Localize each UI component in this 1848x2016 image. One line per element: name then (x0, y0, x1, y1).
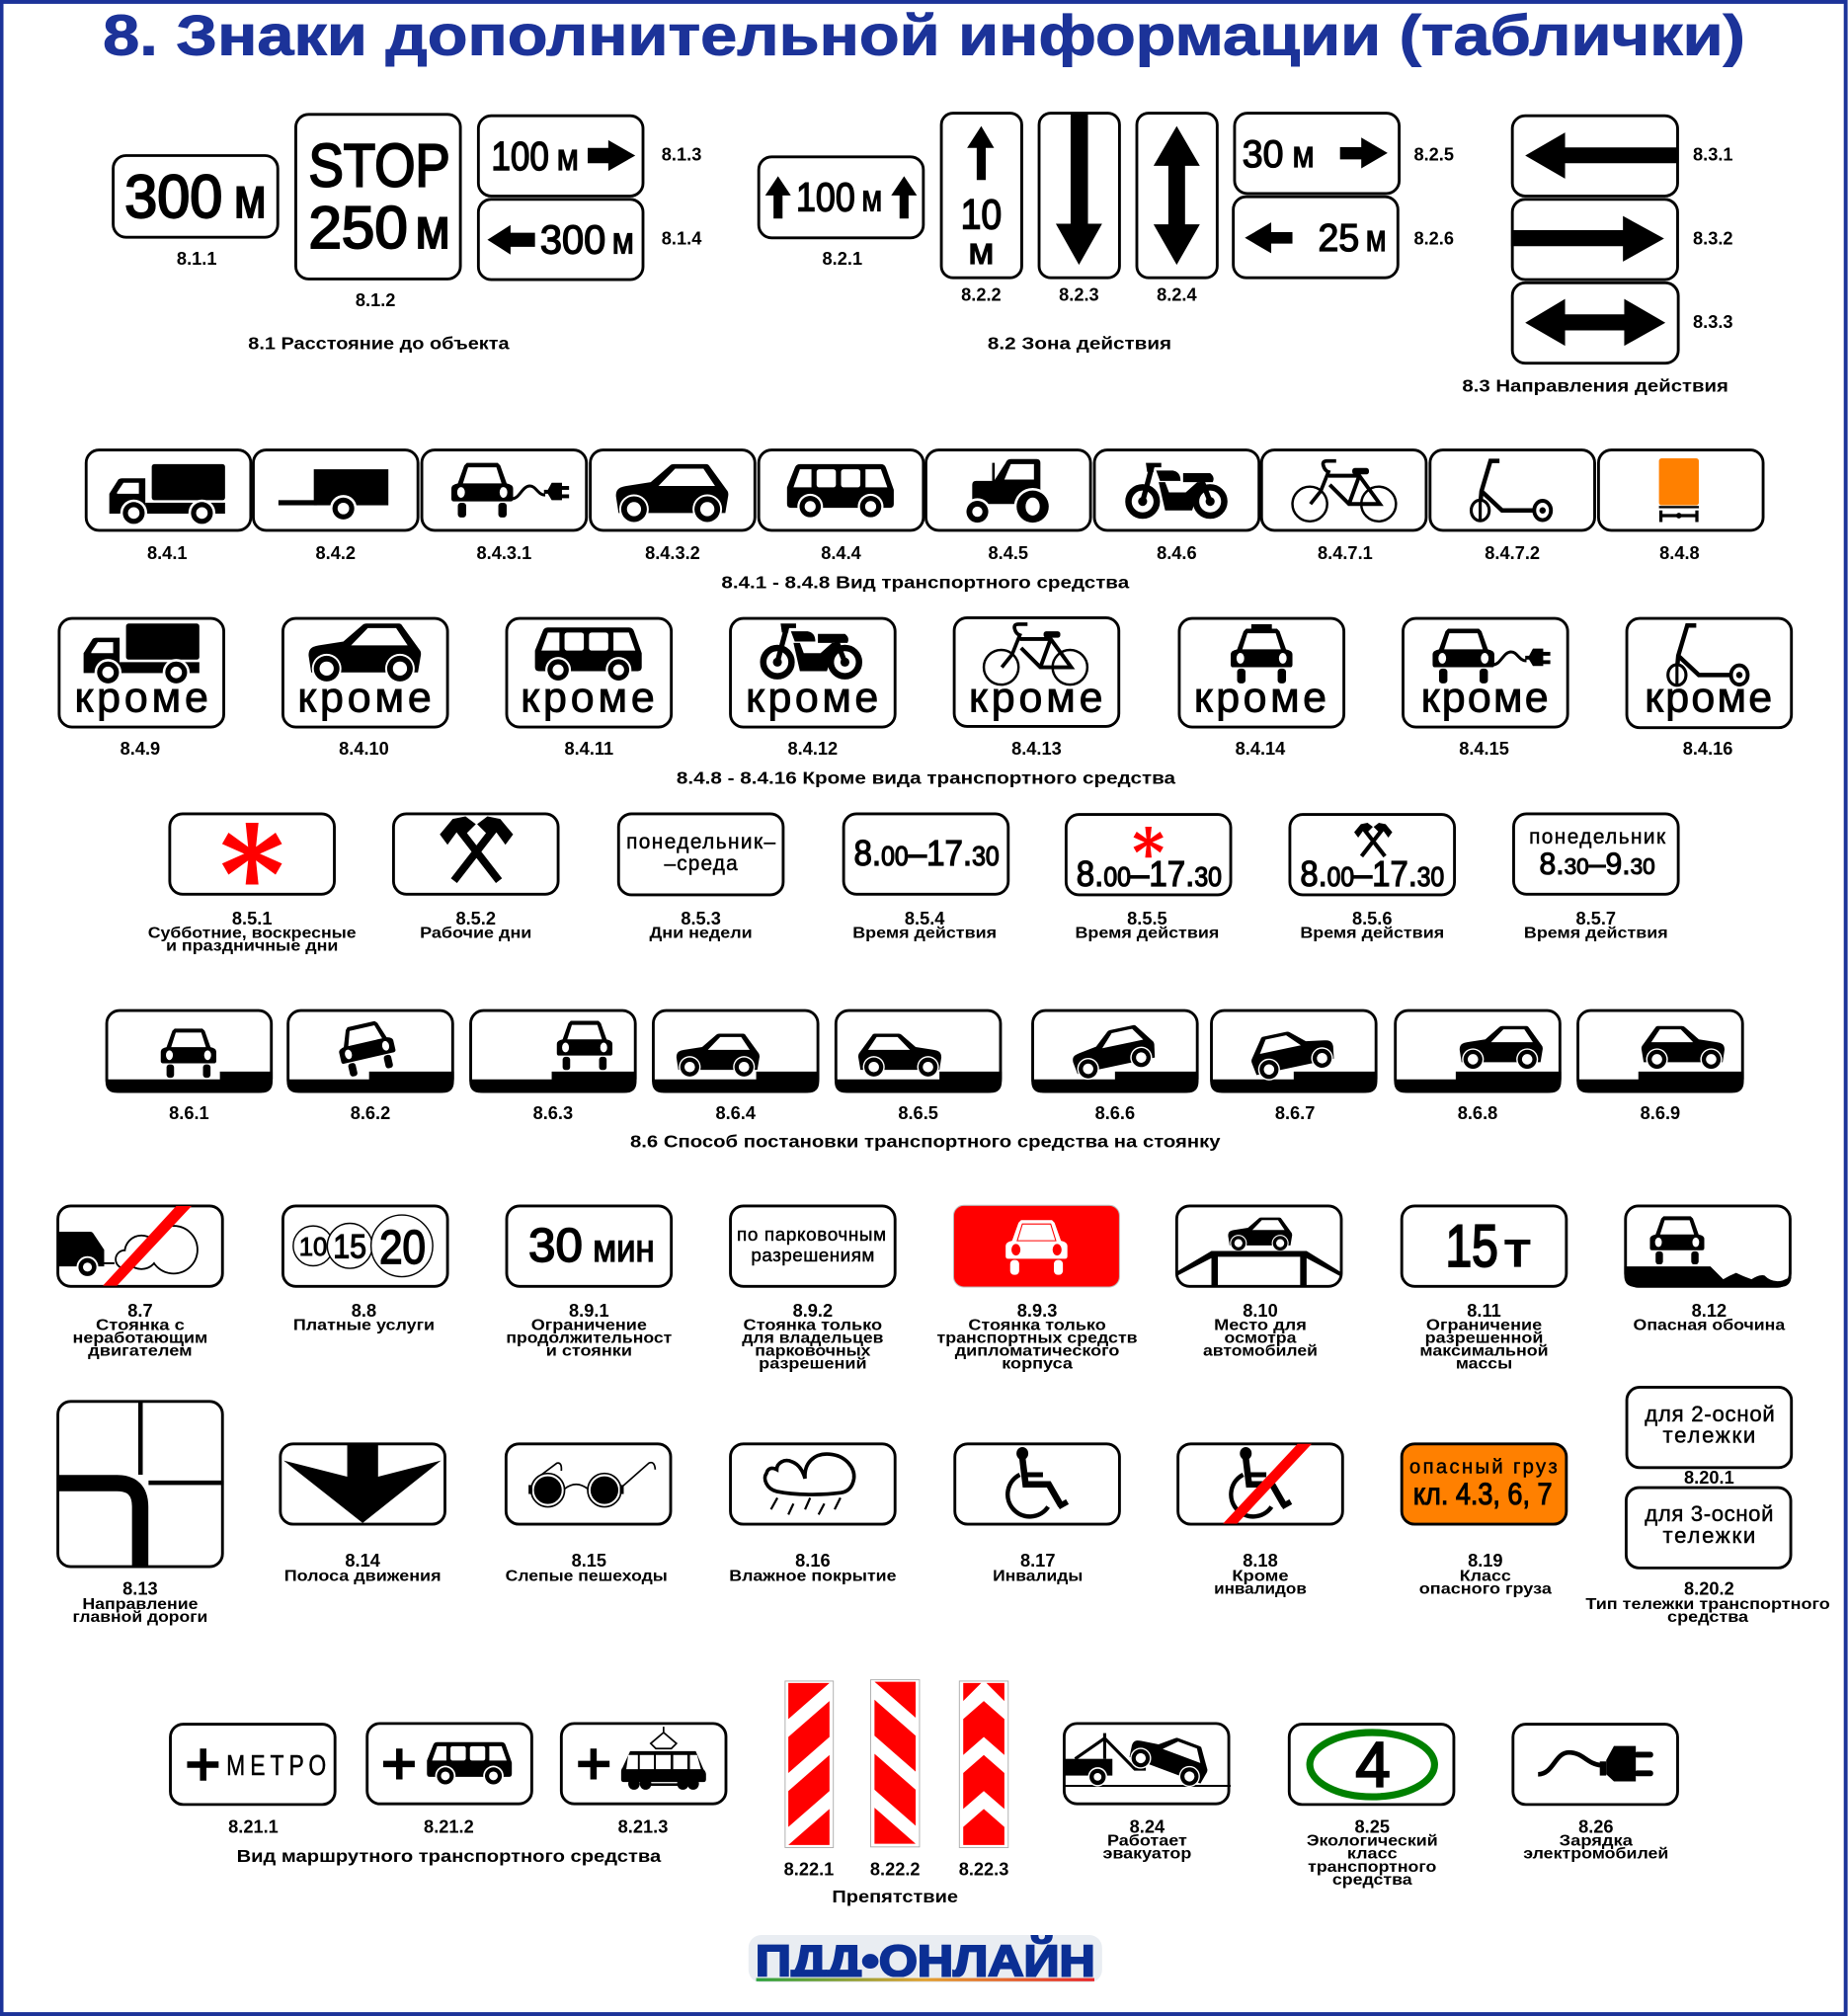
label 8.6.3: 8.6.3 (533, 1103, 573, 1123)
label 8.10 (1203, 1301, 1318, 1360)
label 8.6.7: 8.6.7 (1275, 1103, 1315, 1123)
sign 8.3.3 (1512, 282, 1678, 363)
sign 8.5.3 (618, 814, 783, 895)
title: 8. Знаки дополнительной информации (таблички) (103, 4, 1745, 67)
sign 8.1.4 (478, 200, 643, 280)
label 8.26: Зарядка (1560, 1833, 1633, 1850)
label 8.9.1: Ограничение (531, 1318, 647, 1334)
label 8.13: Направление (82, 1596, 199, 1613)
label 8.16: Влажное покрытие (729, 1568, 897, 1584)
sign 8.16 (731, 1444, 895, 1524)
sign 8.1.2: м (416, 198, 450, 261)
label 8.5.4: 8.5.4 (905, 909, 945, 928)
label 8.4.10: 8.4.10 (339, 739, 389, 759)
label 8.19 (1419, 1551, 1552, 1597)
label 8.7: неработающим (73, 1331, 207, 1347)
sign 8.1.1: 300 (124, 163, 222, 230)
sign 8.4.8 (1598, 450, 1763, 530)
label 8.4.5: 8.4.5 (989, 543, 1028, 563)
label 8.15: 8.15 (572, 1551, 606, 1571)
label 8.20.2: Тип тележки транспортного (1585, 1596, 1830, 1613)
label 8.6.6: 8.6.6 (1095, 1103, 1135, 1123)
sign 8.25 (1289, 1725, 1454, 1805)
label 8.9.3: Стоянка только (968, 1318, 1106, 1334)
sign 8.4.14: кроме (1194, 674, 1326, 721)
label 8.9.1 (506, 1301, 673, 1360)
label 8.26: 8.26 (1578, 1817, 1614, 1837)
sign 8.4.10 (282, 618, 447, 727)
sign 8.2.5: 30 (1243, 133, 1283, 176)
label 8.20.2 (1585, 1579, 1830, 1626)
caption 8.4.8 - 8.4.16: 8.4.8 - 8.4.16 Кроме вида транспортного средства (677, 767, 1175, 787)
label 8.10: 8.10 (1243, 1301, 1278, 1321)
label 8.5.7: 8.5.7 (1576, 909, 1616, 928)
label 8.24: эвакуатор (1102, 1846, 1191, 1863)
sign 8.7 (58, 1206, 222, 1286)
sign 8.14 (281, 1442, 444, 1524)
label 8.7 (73, 1301, 207, 1360)
sign 8.1.2 (295, 115, 460, 279)
label 8.4.8: 8.4.8 (1659, 543, 1700, 563)
label 8.5.4 (852, 909, 997, 942)
label 8.5.5: 8.5.5 (1127, 909, 1167, 928)
sign 8.1.2: STOP (308, 132, 450, 200)
sign 8.4.7.2 (1430, 450, 1595, 530)
sign 8.2.2: 10 (961, 192, 1002, 239)
label 8.5.6: 8.5.6 (1352, 909, 1393, 928)
sign 8.22.2 (870, 1680, 920, 1847)
sign 8.4.11 (507, 618, 672, 727)
label 8.11: массы (1456, 1356, 1512, 1373)
label 8.4.7.2: 8.4.7.2 (1485, 543, 1540, 563)
label 8.5.2: Рабочие дни (420, 926, 531, 942)
label 8.5.1: и праздничные дни (166, 938, 338, 955)
label 8.5.6: Время действия (1300, 926, 1444, 942)
label 8.10: автомобилей (1203, 1343, 1318, 1360)
label 8.24: Работает (1107, 1833, 1187, 1850)
label 8.25: 8.25 (1355, 1817, 1390, 1837)
sign 8.4.13: кроме (969, 674, 1102, 721)
label 8.24: 8.24 (1130, 1817, 1165, 1837)
sign 8.8: 10 (299, 1232, 327, 1261)
sign 8.4.11: кроме (521, 674, 655, 721)
sign 8.9.1: мин (593, 1228, 655, 1270)
sign 8.2.1 (759, 157, 924, 238)
sign 8.5.5 (1066, 815, 1231, 895)
label 8.5.1 (148, 909, 357, 955)
sign 8.2.5 (1235, 114, 1400, 194)
label 8.12: 8.12 (1692, 1301, 1727, 1321)
sign 8.19 (1402, 1444, 1567, 1524)
label 8.4.7.1: 8.4.7.1 (1318, 543, 1373, 563)
label 8.4.1: 8.4.1 (147, 543, 188, 563)
label 8.2.4: 8.2.4 (1157, 285, 1197, 305)
sign 8.5.3: понедельник– (626, 831, 776, 853)
sign 8.21.1: МЕТРО (226, 1751, 326, 1782)
sign 8.22.3 (959, 1681, 1008, 1847)
sign 8.6.5 (835, 1010, 1002, 1092)
sign 8.9.3 (953, 1205, 1119, 1287)
label 8.20.2: 8.20.2 (1684, 1579, 1734, 1599)
sign 8.20.1: для 2-осной (1645, 1402, 1775, 1426)
label 8.25: транспортного (1308, 1859, 1436, 1876)
logo: ПДД•ОНЛАЙН (756, 1936, 1095, 1986)
sign 8.4.15: кроме (1421, 674, 1549, 721)
sign 8.4.10: кроме (297, 674, 432, 721)
sign 8.26 (1513, 1725, 1677, 1805)
sign 8.1.4: м (612, 219, 634, 261)
label 8.18: Кроме (1232, 1568, 1289, 1584)
sign 8.6.9 (1576, 1010, 1744, 1092)
sign 8.6.1 (106, 1010, 273, 1092)
sign 8.8 (282, 1206, 447, 1286)
sign 8.18 (1178, 1444, 1342, 1524)
sign 8.2.4 (1137, 114, 1217, 278)
label 8.22.1: 8.22.1 (784, 1859, 834, 1879)
label 8.4.11: 8.4.11 (564, 739, 613, 759)
caption 8.2: 8.2 Зона действия (988, 333, 1171, 353)
label 8.5.1: 8.5.1 (232, 909, 272, 928)
sign 8.6.2 (286, 1010, 454, 1092)
sign 8.6.4 (652, 1010, 819, 1092)
sign 8.1.3 (478, 116, 643, 197)
label 8.9.2 (742, 1301, 883, 1373)
sign 8.4.12 (731, 618, 895, 727)
label 8.15: Слепые пешеходы (506, 1568, 668, 1584)
label 8.18: инвалидов (1214, 1580, 1307, 1597)
sign 8.4.1 (86, 450, 251, 530)
sign 8.6.7 (1210, 1010, 1377, 1092)
label 8.2.3: 8.2.3 (1059, 285, 1099, 305)
label 8.4.2: 8.4.2 (316, 543, 356, 563)
label 8.2.5: 8.2.5 (1413, 145, 1454, 165)
label 8.18: 8.18 (1243, 1551, 1278, 1571)
label 8.3.1: 8.3.1 (1693, 145, 1733, 165)
sign 8.4.3.1 (422, 450, 587, 530)
label 8.20.1: 8.20.1 (1684, 1468, 1734, 1488)
label 8.12 (1634, 1301, 1786, 1334)
label 8.1.1: 8.1.1 (177, 249, 216, 269)
label 8.9.2: парковочных (755, 1343, 871, 1360)
label 8.9.3: 8.9.3 (1017, 1301, 1057, 1321)
sign 8.8: 20 (379, 1221, 426, 1274)
label 8.9.3 (937, 1301, 1138, 1373)
label 8.4.3.1: 8.4.3.1 (477, 543, 531, 563)
label 8.9.2: Стоянка только (744, 1318, 882, 1334)
label 8.5.1: Субботние, воскресные (148, 926, 357, 942)
label 8.25: Экологический (1307, 1833, 1438, 1850)
label 8.5.5 (1075, 909, 1219, 942)
sign 8.21.1 (171, 1725, 335, 1805)
label 8.13: 8.13 (122, 1579, 158, 1599)
label 8.2.1: 8.2.1 (823, 249, 862, 269)
label 8.5.2 (420, 909, 531, 942)
label 8.4.12: 8.4.12 (788, 739, 838, 759)
sign 8.4.13 (954, 617, 1119, 726)
sign 8.2.1: 100 (796, 174, 855, 219)
sign 8.4.9 (59, 618, 224, 727)
label 8.9.3: транспортных средств (937, 1331, 1138, 1347)
label 8.9.1: 8.9.1 (569, 1301, 609, 1321)
sign 8.1.3: м (557, 136, 579, 178)
label 8.9.2: 8.9.2 (793, 1301, 833, 1321)
sign 8.5.7 (1513, 814, 1678, 894)
sign 8.5.4 (844, 814, 1008, 894)
sign 8.20.2: для 3-осной (1645, 1501, 1773, 1526)
caption 8.22: Препятствие (832, 1887, 958, 1906)
sign 8.4.12: кроме (746, 674, 878, 721)
sign 8.25: 4 (1355, 1730, 1390, 1801)
label 8.8: 8.8 (352, 1301, 376, 1321)
label 8.5.5: Время действия (1075, 926, 1219, 942)
label 8.9.3: корпуса (1002, 1356, 1073, 1373)
label 8.11: разрешенной (1425, 1331, 1543, 1347)
sign 8.2.6: м (1366, 217, 1387, 259)
label 8.5.2: 8.5.2 (455, 909, 496, 928)
sign 8.5.3: –среда (664, 852, 738, 875)
label 8.25 (1307, 1817, 1438, 1889)
label 8.26: электромобилей (1523, 1846, 1668, 1863)
label 8.2.2: 8.2.2 (961, 285, 1002, 305)
sign 8.21.3 (561, 1724, 726, 1804)
label 8.1.4: 8.1.4 (662, 228, 702, 248)
sign 8.9.2 (731, 1206, 895, 1286)
sign 8.5.7: 8.30–9.30 (1540, 847, 1655, 881)
sign 8.21.2 (367, 1724, 531, 1804)
sign 8.5.2 (393, 814, 558, 894)
sign 8.4.7.1 (1261, 450, 1426, 530)
label 8.24 (1102, 1817, 1191, 1863)
sign 8.11 (1402, 1206, 1567, 1286)
label 8.11: Ограничение (1426, 1318, 1542, 1334)
sign 8.17 (955, 1444, 1119, 1524)
sign 8.5.6 (1290, 815, 1455, 895)
label 8.3.3: 8.3.3 (1693, 312, 1733, 332)
sign 8.4.2 (253, 450, 418, 530)
label 8.17 (993, 1551, 1083, 1584)
sign 8.1.1 (114, 156, 278, 237)
sign 8.15 (506, 1444, 671, 1524)
sign 8.12 (1624, 1206, 1792, 1287)
label 8.25: средства (1332, 1872, 1412, 1889)
label 8.7: Стоянка с (96, 1318, 185, 1334)
label 8.16: 8.16 (795, 1551, 831, 1571)
label 8.8: Платные услуги (293, 1318, 435, 1334)
sign 8.19: кл. 4.3, 6, 7 (1413, 1477, 1553, 1511)
label 8.4.15: 8.4.15 (1459, 739, 1509, 759)
label 8.18 (1214, 1551, 1307, 1597)
label 8.2.6: 8.2.6 (1413, 228, 1454, 248)
sign 8.2.2: м (968, 230, 994, 272)
sign 8.6.3 (469, 1010, 636, 1092)
caption 8.3: 8.3 Направления действия (1462, 375, 1728, 395)
label 8.6.1: 8.6.1 (169, 1103, 209, 1123)
label 8.14: Полоса движения (284, 1568, 442, 1584)
sign 8.13 (58, 1402, 224, 1568)
sign 8.1.4: 300 (540, 216, 605, 262)
sign 8.4.16: кроме (1645, 674, 1772, 721)
sign 8.20.1 (1627, 1387, 1792, 1468)
label 8.4.16: 8.4.16 (1683, 739, 1732, 759)
label 8.20.2: средства (1667, 1609, 1748, 1626)
sign 8.4.15 (1404, 618, 1567, 727)
label 8.21.3: 8.21.3 (618, 1817, 668, 1837)
sign 8.6.8 (1394, 1010, 1562, 1092)
label 8.13: главной дороги (73, 1609, 207, 1626)
caption 8.21: Вид маршрутного транспортного средства (237, 1846, 661, 1866)
sign 8.2.6: 25 (1319, 217, 1359, 260)
sign 8.22.1 (785, 1681, 834, 1847)
sign 8.4.6 (1094, 450, 1259, 530)
sign 8.2.3 (1039, 114, 1119, 278)
label 8.5.4: Время действия (852, 926, 997, 942)
sign 8.20.2: тележки (1663, 1523, 1755, 1548)
sign 8.20.1: тележки (1663, 1422, 1755, 1447)
label 8.5.3 (650, 909, 753, 942)
label 8.5.3: 8.5.3 (681, 909, 721, 928)
label 8.11: максимальной (1419, 1343, 1549, 1360)
sign 8.4.5 (925, 450, 1090, 530)
label 8.10: Место для (1214, 1318, 1307, 1334)
label 8.8 (293, 1301, 435, 1334)
label 8.9.3: дипломатического (955, 1343, 1119, 1360)
sign 8.10 (1176, 1206, 1341, 1286)
label 8.14 (284, 1551, 442, 1584)
sign 8.9.2: по парковочным (737, 1224, 886, 1245)
label 8.16 (729, 1551, 897, 1584)
sign 8.9.1 (507, 1206, 672, 1286)
sign 8.2.2 (941, 114, 1021, 278)
sign 8.11: 15 (1445, 1213, 1498, 1279)
label 8.11: 8.11 (1467, 1301, 1501, 1321)
label 8.13 (73, 1579, 207, 1626)
label 8.15 (506, 1551, 668, 1584)
sign 8.4.4 (759, 450, 924, 530)
label 8.6.8: 8.6.8 (1458, 1103, 1497, 1123)
sign 8.5.1 (170, 814, 335, 894)
label 8.4.14: 8.4.14 (1236, 739, 1286, 759)
sign 8.11: т (1504, 1223, 1530, 1277)
label 8.3.2: 8.3.2 (1693, 228, 1733, 248)
label 8.11 (1419, 1301, 1549, 1373)
label 8.5.6 (1300, 909, 1444, 942)
sign 8.2.5: м (1293, 133, 1315, 175)
label 8.1.2: 8.1.2 (356, 290, 395, 310)
label 8.4.4: 8.4.4 (821, 543, 862, 563)
label 8.22.2: 8.22.2 (870, 1859, 921, 1879)
sign 8.4.9: кроме (75, 674, 208, 721)
label 8.6.2: 8.6.2 (351, 1103, 390, 1123)
sign 8.3.2 (1511, 200, 1677, 280)
sign 8.5.6: 8.00–17.30 (1300, 853, 1444, 894)
label 8.14: 8.14 (345, 1551, 381, 1571)
sign 8.2.1: м (861, 177, 882, 218)
sign 8.9.1: 30 (528, 1219, 583, 1272)
sign 8.5.4: 8.00–17.30 (854, 833, 1000, 873)
label 8.19: опасного груза (1419, 1580, 1552, 1597)
label 8.22.3: 8.22.3 (959, 1859, 1008, 1879)
label 8.21.2: 8.21.2 (424, 1817, 474, 1837)
label 8.10: осмотра (1225, 1331, 1297, 1347)
label 8.25: класс (1347, 1846, 1398, 1863)
sign 8.9.2: разрешениям (751, 1245, 874, 1265)
label 8.4.13: 8.4.13 (1011, 739, 1062, 759)
label 8.9.2: разрешений (759, 1356, 867, 1373)
sign 8.4.16 (1627, 618, 1792, 728)
sign 8.6.6 (1031, 1010, 1198, 1092)
sign 8.5.5: 8.00–17.30 (1077, 853, 1222, 894)
sign 8.8: 15 (333, 1229, 366, 1266)
label 8.21.1: 8.21.1 (228, 1817, 279, 1837)
sign 8.24 (1064, 1724, 1231, 1804)
label 8.19: 8.19 (1468, 1551, 1503, 1571)
caption 8.6: 8.6 Способ постановки транспортного средства на стоянку (630, 1132, 1221, 1152)
sign 8.19: опасный груз (1409, 1457, 1558, 1479)
label 8.1.3: 8.1.3 (662, 145, 701, 165)
label 8.12: Опасная обочина (1634, 1318, 1786, 1334)
label 8.6.9: 8.6.9 (1641, 1103, 1680, 1123)
sign 8.2.6 (1234, 197, 1398, 278)
label 8.4.9: 8.4.9 (121, 739, 160, 759)
sign 8.1.3: 100 (491, 133, 549, 179)
label 8.26 (1523, 1817, 1668, 1863)
sign 8.4.3.2 (591, 450, 755, 530)
label 8.9.1: и стоянки (546, 1343, 632, 1360)
caption 8.4.1 - 8.4.8: 8.4.1 - 8.4.8 Вид транспортного средства (721, 573, 1129, 593)
label 8.7: 8.7 (127, 1301, 153, 1321)
label 8.17: Инвалиды (993, 1568, 1083, 1584)
sign 8.1.2: 250 (308, 195, 408, 261)
sign 8.3.1 (1512, 116, 1678, 197)
label 8.19: Класс (1460, 1568, 1511, 1584)
label 8.6.4: 8.6.4 (715, 1103, 757, 1123)
sign 8.4.14 (1179, 618, 1344, 727)
label 8.5.7: Время действия (1524, 926, 1668, 942)
label 8.4.6: 8.4.6 (1157, 543, 1197, 563)
label 8.9.2: для владельцев (742, 1331, 883, 1347)
label 8.6.5: 8.6.5 (898, 1103, 938, 1123)
label 8.17: 8.17 (1020, 1551, 1055, 1571)
label 8.4.3.2: 8.4.3.2 (645, 543, 700, 563)
sign 8.20.2 (1626, 1488, 1791, 1568)
sign 8.5.7: понедельник (1529, 826, 1666, 848)
sign 8.1.1: м (234, 167, 267, 230)
label 8.7: двигателем (88, 1343, 193, 1360)
label 8.5.3: Дни недели (650, 926, 753, 942)
label 8.5.7 (1524, 909, 1668, 942)
caption 8.1: 8.1 Расстояние до объекта (248, 333, 510, 353)
label 8.9.1: продолжительност (506, 1331, 673, 1347)
